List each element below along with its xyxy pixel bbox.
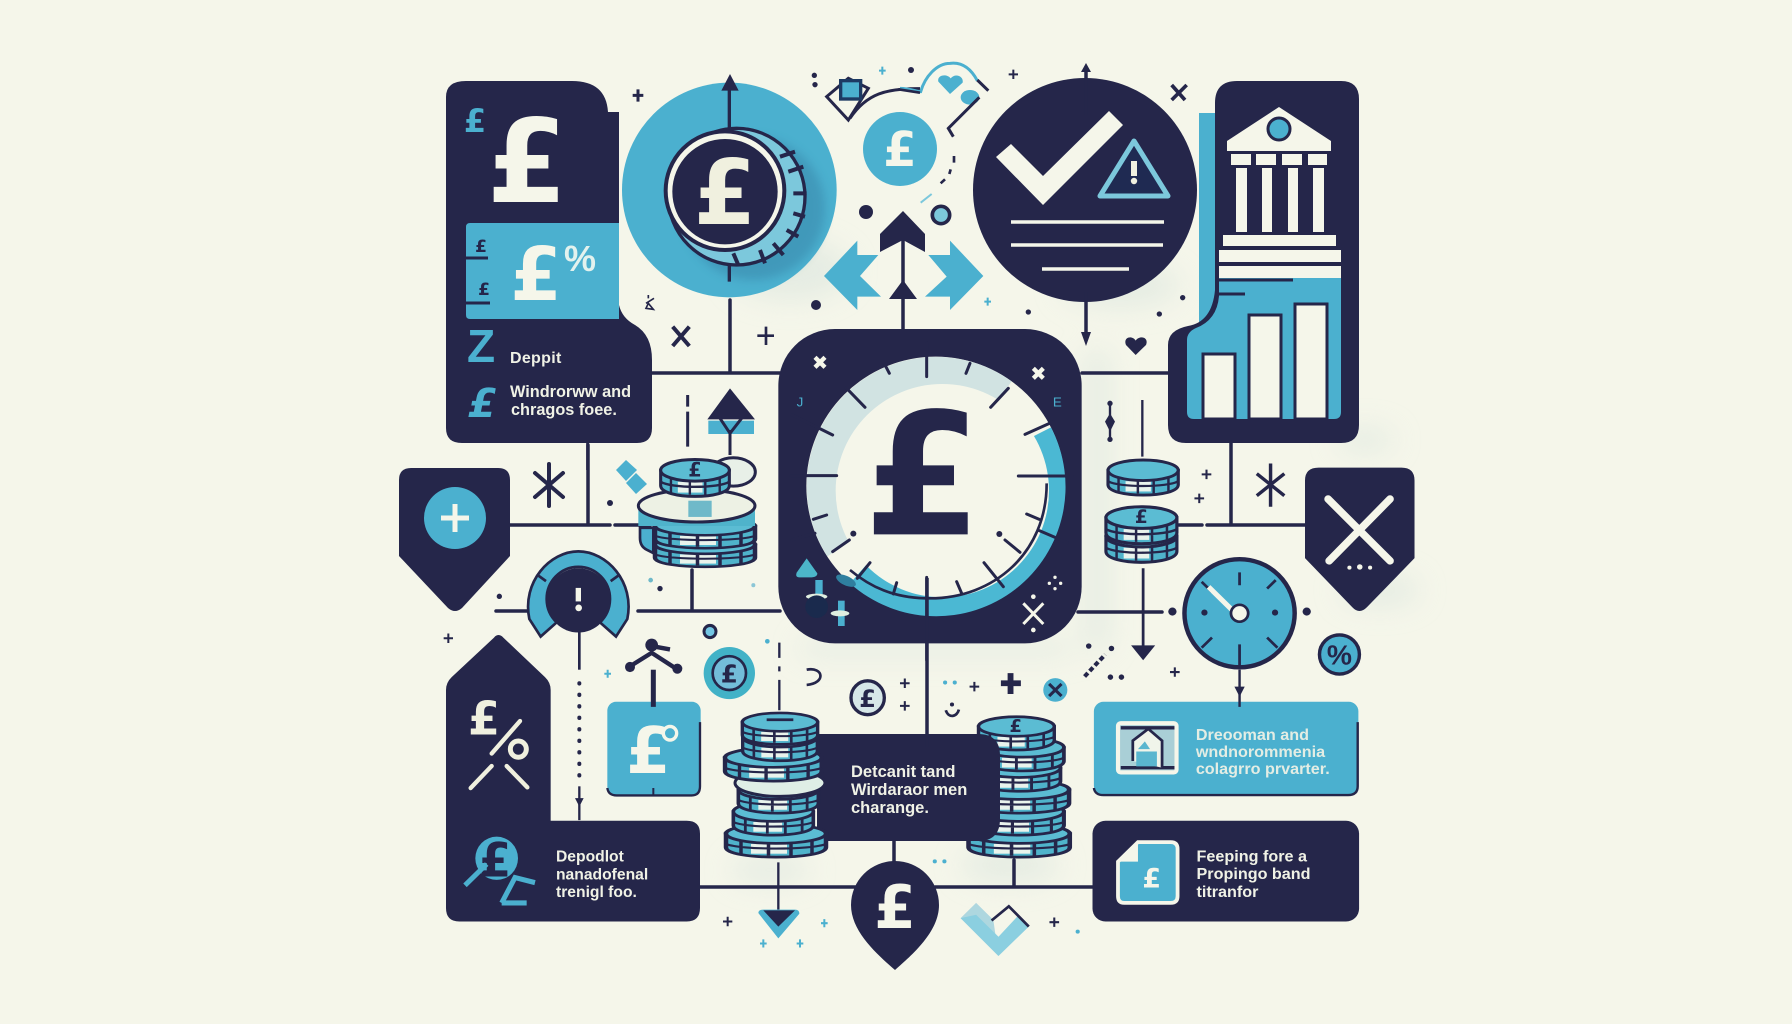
- panel: central pound dial: [778, 329, 1082, 660]
- icon: pound percent: £: [468, 691, 500, 746]
- blue fee card: %: [564, 238, 596, 279]
- icon: circular pound coins: [648, 578, 884, 715]
- coin stack: middle left: [638, 458, 755, 567]
- icon: diamond tag: [827, 78, 868, 120]
- pin: bottom pound: [851, 861, 939, 970]
- panel: blue pound card: £: [626, 714, 670, 789]
- small pound icon: £: [464, 102, 486, 140]
- panel: bottom left deposit: [446, 635, 700, 922]
- panel: top left deposit and charges: [446, 81, 652, 443]
- icon: blue check mark: [933, 859, 1080, 956]
- document pound icon: [1118, 842, 1178, 903]
- icon: branching node: [604, 639, 682, 678]
- dotted connector: [573, 683, 585, 778]
- percent badge: [1319, 635, 1359, 674]
- small house arrow: [588, 295, 774, 470]
- icon: pound percent: [468, 691, 527, 788]
- withdrawal label: chragos foee.: [511, 401, 617, 419]
- heart and decorative arc: [898, 63, 1187, 355]
- blue card text: colagrro prvarter.: [1196, 760, 1330, 778]
- arrow: blue right chevron: [925, 241, 983, 310]
- blue card text: Dreooman and: [1196, 726, 1309, 744]
- coin stack: bottom right: £: [1009, 717, 1022, 737]
- circle: blue coin: [622, 74, 837, 297]
- Z icon: Z: [467, 320, 495, 372]
- middle panel text: Wirdaraor men: [851, 781, 967, 799]
- blue fee card: [466, 223, 619, 319]
- blue ring: [850, 427, 1066, 616]
- corner marks: J: [797, 395, 803, 410]
- pound symbol: £: [864, 377, 982, 575]
- arc to heart: [850, 89, 920, 118]
- gauge with warning: [444, 551, 629, 820]
- dial-right decorations and clock: [900, 464, 1359, 716]
- coin stack: bottom left: [725, 713, 826, 910]
- pale ring: [807, 357, 1012, 556]
- house icon frame: [1118, 723, 1177, 772]
- blue fee card: £: [478, 280, 490, 300]
- circle: blue coin: £: [694, 141, 756, 246]
- coin stack: middle left: £: [688, 458, 702, 481]
- middle panel text: charange.: [851, 799, 929, 817]
- circle: small blue pound: £: [883, 122, 917, 178]
- panel: transfer fee: [1093, 821, 1359, 922]
- clock: [1168, 559, 1311, 707]
- percent badge: %: [1327, 640, 1352, 671]
- arrow: blue left chevron: [824, 241, 881, 310]
- coin stack: middle right: [1106, 460, 1178, 562]
- icon: blue pound coin: £: [479, 833, 511, 889]
- circle: checklist with warning: [973, 63, 1197, 346]
- bottom left text: Depodlot: [556, 849, 625, 866]
- blue card text: wndnorommenia: [1195, 743, 1326, 761]
- arrows through circle: [1081, 63, 1091, 346]
- right side vertical marks: [984, 298, 1231, 470]
- icon: circular pound coins: £: [859, 685, 876, 713]
- icon: blue pound coin: [465, 833, 535, 903]
- panel: bank with bar chart: [1168, 81, 1359, 443]
- middle panel text: Detcanit tand: [851, 763, 956, 781]
- top centre icons: [633, 67, 920, 120]
- coin face: [666, 131, 784, 250]
- panel: blue pound card: [607, 670, 701, 795]
- pin: bottom pound: £: [874, 873, 916, 943]
- panel: middle deposit text: [817, 578, 1000, 841]
- slashed pound icon: £: [468, 381, 496, 427]
- coin edge: [668, 128, 805, 265]
- blue fee card: £: [510, 232, 562, 318]
- bar chart: [1203, 304, 1327, 419]
- corner marks: [797, 357, 1062, 632]
- panel: withdrawal blue card: [1094, 702, 1358, 795]
- small marks: [900, 464, 1284, 716]
- bottom left text: nanadofenal: [556, 866, 648, 883]
- coin stack: middle right: £: [1135, 507, 1148, 528]
- transfer fee text: titranfor: [1197, 883, 1258, 901]
- central up arrow: [811, 205, 925, 310]
- arrow down: [1131, 568, 1155, 660]
- icon: dots and plus: [633, 67, 886, 102]
- bottom left text: trenigl foo.: [556, 884, 637, 901]
- connector lines: [496, 220, 1305, 887]
- arrow: blue down chevron: [723, 910, 828, 948]
- dial ticks: [791, 343, 1072, 660]
- panel: cross shield: [1305, 468, 1415, 611]
- icon: blue tiles: [607, 460, 647, 506]
- corner marks: E: [1053, 395, 1062, 410]
- circle: small blue pound: [863, 112, 937, 186]
- document pound icon: £: [1142, 864, 1161, 895]
- transfer fee text: Feeping fore a: [1197, 848, 1308, 866]
- arrow through coin: [721, 74, 739, 282]
- transfer fee text: Propingo band: [1197, 865, 1311, 883]
- soft shadows: [730, 240, 1420, 884]
- large pound symbol: £: [487, 95, 567, 230]
- blue fee card: £: [475, 237, 487, 257]
- icon: circular pound coins: £: [721, 659, 738, 689]
- icon: starburst left: [535, 464, 563, 506]
- gem cluster: [796, 558, 858, 626]
- warning triangle: [1100, 141, 1168, 196]
- panel: plus shield: [399, 468, 510, 611]
- withdrawal label: Windrorww and: [510, 383, 631, 401]
- bank icon: [1219, 107, 1341, 278]
- coin stack: bottom right: [969, 717, 1070, 887]
- deposit label: Deppit: [510, 350, 562, 367]
